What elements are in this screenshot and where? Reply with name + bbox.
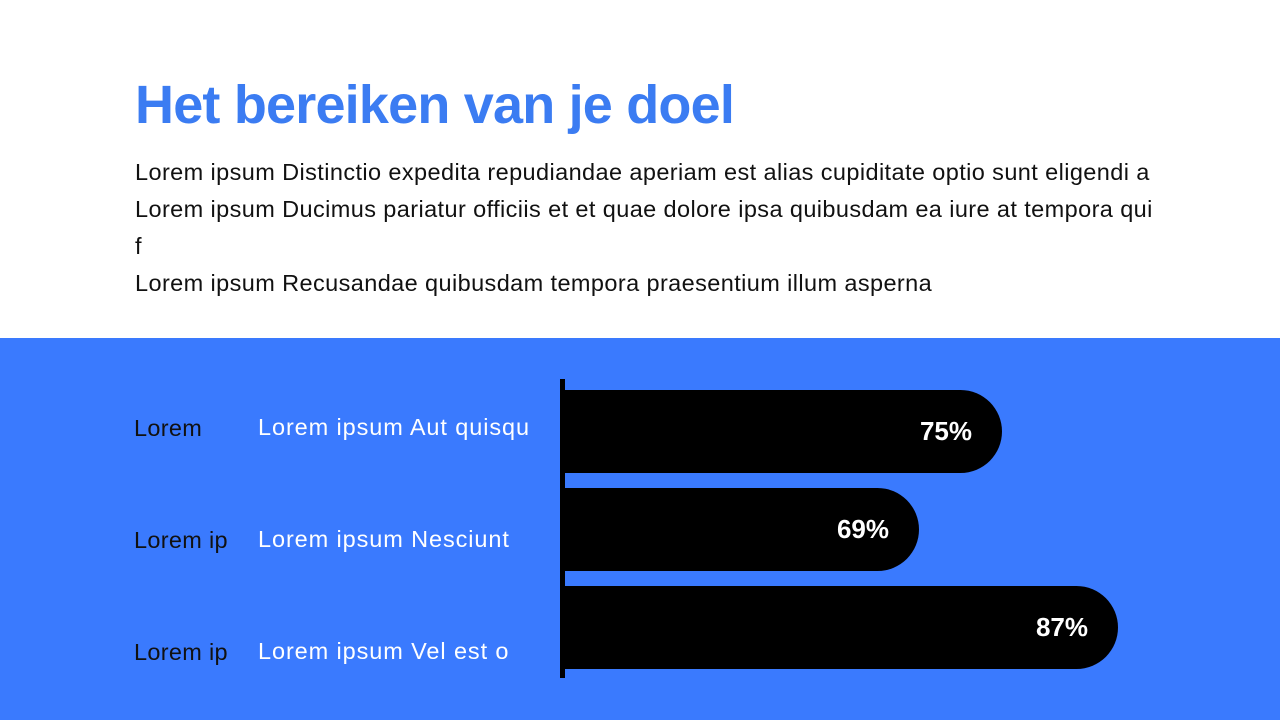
- bar 1: 75%: [565, 390, 1002, 473]
- label row 1: Lorem: [134, 415, 202, 441]
- label row 2: Lorem ip: [134, 527, 228, 553]
- title: Het bereiken van je doel: [135, 75, 734, 135]
- bar 3: 87%: 87%: [1036, 612, 1088, 642]
- description row 3: Lorem ipsum Vel est o: [258, 638, 509, 664]
- text block: description: Lorem ipsum Distinctio expedita repudiandae aperiam est alias cupiditate optio sunt eligendi a: [135, 159, 1150, 185]
- panel: blue band: [0, 338, 1280, 720]
- text block: description: Lorem ipsum Ducimus pariatur officiis et et quae dolore ipsa quibusdam ea iure at tempora qui: [135, 196, 1153, 222]
- text block: description: [135, 159, 1153, 296]
- bar 2: 69%: [565, 488, 919, 571]
- label row 3: Lorem ip: [134, 639, 228, 665]
- text block: description: f: [135, 233, 142, 259]
- description row 1: Lorem ipsum Aut quisqu: [258, 414, 530, 440]
- bar 3: 87%: [565, 586, 1118, 669]
- description row 2: Lorem ipsum Nesciunt: [258, 526, 510, 552]
- text block: description: Lorem ipsum Recusandae quibusdam tempora praesentium illum asperna: [135, 270, 932, 296]
- bar 1: 75%: 75%: [920, 416, 972, 446]
- axis line: [560, 379, 565, 678]
- bar 2: 69%: 69%: [837, 514, 889, 544]
